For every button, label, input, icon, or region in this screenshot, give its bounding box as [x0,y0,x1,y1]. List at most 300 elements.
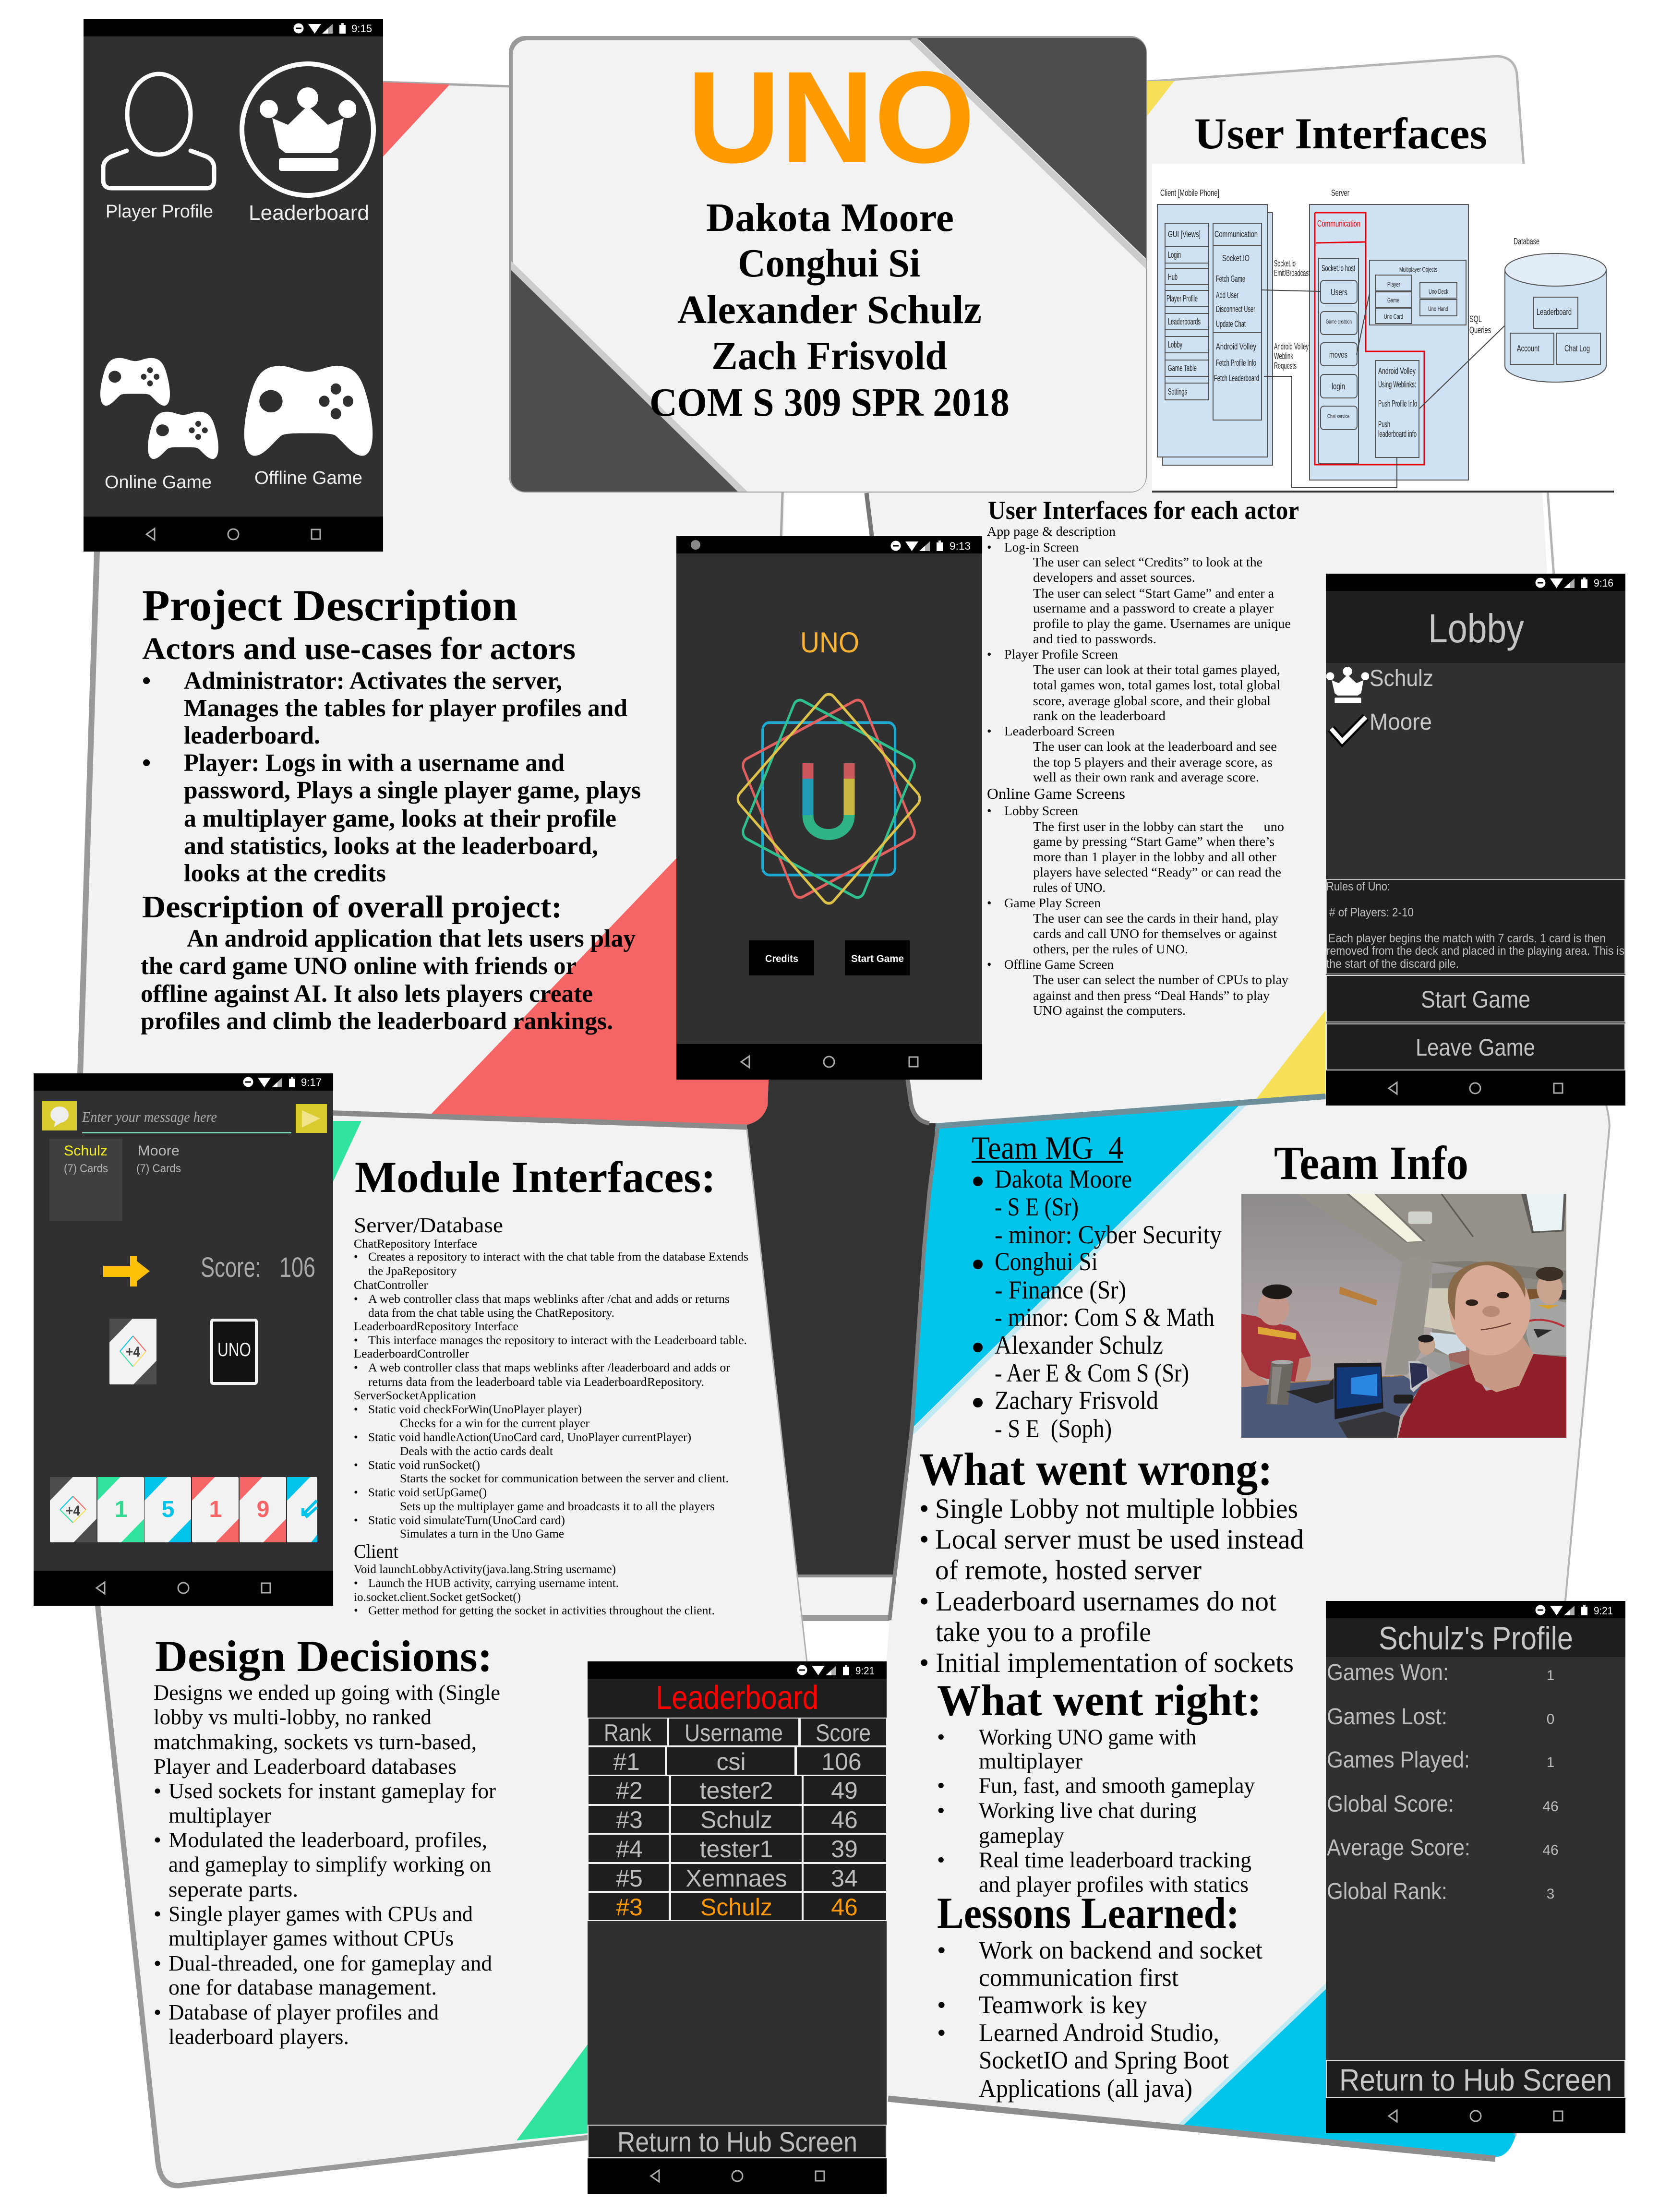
chart: architecture diagram: Add User [1216,290,1238,300]
text block: what went wrong: • [919,1647,929,1678]
phone: leaderboard screen [588,1661,887,2194]
text block: what went wrong: Initial implementation of sockets [936,1647,1294,1678]
text block: design decisions: • [154,1901,161,1926]
table: rankings: 106 [821,1748,862,1775]
chart: architecture diagram: Chat Log [1564,344,1590,353]
button: Start Game [1326,975,1625,1022]
chart: architecture diagram: Uno Card [1384,313,1403,320]
chart: architecture diagram: Lobby [1168,340,1182,349]
table: rankings: #1 [613,1748,640,1775]
phone: game play screen [34,1073,333,1606]
text block: design decisions: multiplayer [168,1803,271,1827]
button: Credits: Credits [765,953,798,964]
text block: user interfaces for each actor: Leaderboard Screen [1004,724,1115,738]
table: rankings: #2 [616,1777,643,1804]
text block: user interfaces for each actor: The user can look at the leaderboard and see [1033,739,1277,754]
button: Start Game [845,940,910,975]
icon: chat button [42,1101,77,1130]
table: rankings: 34 [831,1865,858,1892]
button: Return to Hub Screen: Return to Hub Screen [617,2127,857,2158]
chart: architecture diagram: Update Chat [1216,319,1246,329]
text block: user interfaces for each actor [987,496,1299,1018]
text block: user interfaces for each actor: The user can look at their total games played, [1033,662,1280,677]
chart: architecture diagram: Android Volley [1216,342,1256,351]
text block: project description: password, Plays a single player game, plays [184,777,641,804]
text block: user interfaces for each actor: profile to play the game. Usernames are unique [1033,616,1291,631]
text block: module interfaces: Static void setUpGame() [368,1486,487,1499]
icon: UNO logo [735,691,923,906]
phone: game play screen: 9:17 [301,1076,322,1088]
panel: dark card behind module interfaces [720,1056,941,1621]
team names and course [649,195,1010,425]
text block: module interfaces: the JpaRepository [368,1265,457,1278]
text block: team roster: - minor: Cyber Security [995,1220,1222,1249]
title: Schulz's Profile: Schulz's Profile [1379,1620,1573,1657]
text block: module interfaces: Launch the HUB activity, carrying username intent. [368,1577,619,1590]
stats labels [1327,1660,1470,1904]
chart: architecture diagram: Multiplayer Objects [1399,265,1437,273]
text block: user interfaces for each actor: UNO against the computers. [1033,1003,1186,1018]
text block: module interfaces: • [354,1577,358,1590]
icon: online game controllers [100,358,218,459]
text block: rules of Uno: # of Players: 2-10 [1329,906,1414,919]
stats values: 0 [1547,1711,1554,1727]
text block: team roster: Zachary Frisvold [995,1386,1158,1415]
button: Leave Game: Leave Game [1416,1034,1535,1061]
text block: what went right: Fun, fast, and smooth gameplay [979,1773,1255,1798]
text block: module interfaces: Static void simulateTurn(UnoCard card) [368,1514,565,1527]
label: Moore: Moore [1370,709,1432,735]
text block: module interfaces: ChatRepository Interface [354,1238,477,1250]
phone: hub screen [84,19,383,552]
heading: Design Decisions: Design Decisions: [155,1632,493,1681]
chart: architecture diagram: login [1332,382,1345,391]
text block: user interfaces for each actor: others, per the rules of UNO. [1033,942,1188,956]
text block: lessons learned: Applications (all java) [979,2075,1192,2103]
heading: user interfaces for each actor: User Interfaces for each actor [988,496,1299,525]
team names and course: Conghui Si [738,241,920,286]
text block: user interfaces for each actor: the top 5 players and their average score, as [1033,755,1273,769]
text block: design decisions: Modulated the leaderboard, profiles, [168,1827,487,1852]
chart: architecture diagram: Users [1331,288,1347,297]
text block: project description: Administrator: Activates the server, [184,667,562,695]
text block: what went wrong: • [919,1524,929,1555]
text block: module interfaces: Sets up the multiplayer game and broadcasts it to all the players [400,1500,715,1513]
chart: architecture diagram: Socket.io [1274,259,1296,268]
text block: user interfaces for each actor: score, average global score, and their global [1033,694,1271,708]
icon: host crown [1326,667,1369,703]
chart: architecture diagram: Android Volley [1378,366,1416,376]
text block: project description: Manages the tables for player profiles and [184,695,627,722]
phone: profile screen: 9:21 [1594,1605,1613,1617]
chat input [82,1108,291,1133]
text block: design decisions: • [154,2000,161,2024]
player tile: Schulz: (7) Cards [64,1162,108,1175]
text block: user interfaces for each actor: well as their own rank and average score. [1033,770,1259,784]
text block: lessons learned [937,1888,1262,2103]
chart: architecture diagram: Leaderboard [1537,307,1572,317]
phone: lobby screen: 9:16 [1594,577,1613,589]
chart: architecture diagram: Login [1168,250,1181,260]
icon: navigation bar [741,1056,918,1068]
text block: team roster: - minor: Com S & Math [995,1303,1214,1332]
text block: design decisions: • [154,1779,161,1803]
card: discard +4 [109,1319,156,1384]
text block: user interfaces for each actor: The user can select “Start Game” and enter a [1033,586,1274,601]
text block: module interfaces: • [354,1604,358,1617]
text block: module interfaces: Static void runSocket() [368,1459,480,1472]
stats values: 46 [1542,1842,1559,1858]
button: Return to Hub Screen: Return to Hub Screen [1339,2063,1612,2097]
chart: architecture diagram: moves [1329,350,1347,360]
text block: team roster: Alexander Schulz [995,1331,1163,1359]
text block: user interfaces for each actor: more than 1 player in the lobby and all other [1033,850,1276,864]
text block: user interfaces for each actor: rules of UNO. [1033,880,1106,895]
text block: what went right: multiplayer [979,1749,1082,1774]
icon: navigation bar [96,1582,270,1594]
chart: architecture diagram: Socket.IO [1222,253,1250,263]
text block: module interfaces: returns data from the leaderboard table via LeaderboardRepository. [368,1376,704,1389]
phone: hub screen: 9:15 [351,23,372,35]
text block: module interfaces: Simulates a turn in the Uno Game [400,1527,564,1540]
text block: module interfaces: This interface manages the repository to interact with the Leaderboard table. [368,1334,747,1347]
text block: what went right: • [937,1773,945,1798]
text block: user interfaces for each actor: total games won, total games lost, total global [1033,678,1280,692]
text block: lessons learned: • [937,1936,946,1964]
text block: module interfaces: data from the chat table using the ChatRepository. [368,1307,614,1320]
heading: User Interfaces: User Interfaces [1194,109,1487,158]
icon: player profile [103,74,214,188]
text block: user interfaces for each actor: against and then press “Deal Hands” to play [1033,988,1270,1003]
text block: what went wrong [919,1443,1304,1678]
text block: design decisions: and gameplay to simplify working on [168,1852,491,1876]
label: Online Game: Online Game [105,472,212,493]
heading: What went right: What went right: [937,1676,1262,1725]
text block: project description: • [142,749,151,777]
table: rankings [588,1718,887,1921]
text block: user interfaces for each actor: • [987,957,991,972]
text block: what went right: • [937,1848,945,1873]
text block: project description: profiles and climb the leaderboard rankings. [141,1008,613,1035]
text block: module interfaces: • [354,1293,358,1306]
chart: architecture diagram: Requests [1274,361,1297,371]
text block: team roster [972,1130,1222,1443]
chart: architecture diagram: Game Table [1168,363,1197,373]
text block: user interfaces for each actor: Log-in Screen [1004,540,1079,554]
text block: user interfaces for each actor: rank on the leaderboard [1033,709,1166,723]
chart: architecture diagram: Fetch Game [1216,274,1245,284]
text block: project description: offline against AI. It also lets players create [141,980,593,1008]
chart: architecture diagram: Socket.io host [1322,264,1355,273]
text block: team roster: - Finance (Sr) [995,1275,1126,1304]
text block: user interfaces for each actor: Lobby Screen [1004,804,1079,818]
icon: ready check [1331,717,1366,741]
title: Lobby: Lobby [1428,606,1524,651]
table: rankings: #5 [616,1865,643,1892]
stats values: 3 [1547,1886,1554,1902]
text block: design decisions: Player and Leaderboard databases [154,1754,457,1779]
player tile: Schulz [49,1139,122,1221]
text block: module interfaces: • [354,1361,358,1374]
player hand cards: 5 [162,1497,174,1522]
table: rankings: Username [685,1719,783,1746]
text block: module interfaces: Starts the socket for communication between the server and client. [400,1472,729,1485]
text block: lessons learned: Work on backend and socket [979,1936,1262,1964]
heading: Team Info: Team Info [1274,1136,1468,1190]
chat input: Enter your message here [82,1108,217,1125]
text block: project description: looks at the credits [184,860,386,887]
phone: login screen: 9:13 [950,540,971,552]
stats labels: Global Rank: [1327,1879,1447,1904]
chart: architecture diagram: Using Weblinks: [1378,380,1416,389]
text block: team roster: - S E (Sr) [995,1192,1079,1221]
player hand cards [50,1477,317,1542]
text block: module interfaces: Server/Database [354,1214,503,1237]
text block: module interfaces: Deals with the actio cards dealt [400,1445,553,1458]
chart: architecture diagram: Emit/Broadcast [1274,268,1310,278]
text block: user interfaces for each actor: The user can select the number of CPUs to play [1033,973,1289,987]
chart: architecture diagram: Uno Deck [1429,288,1449,295]
player tile: Moore [136,1143,181,1175]
text block: what went right: and player profiles with statics [979,1872,1249,1897]
chart: architecture diagram: Account [1517,344,1539,353]
stats labels: Average Score: [1327,1835,1470,1861]
chart: architecture diagram: Client [Mobile Phone] [1160,188,1219,198]
text block: what went right [937,1676,1262,1897]
text block: user interfaces for each actor: • [987,647,991,661]
photo: team selfie [1241,1194,1566,1438]
text block: what went wrong: of remote, hosted server [935,1554,1202,1586]
chart: architecture diagram: Fetch Profile Info [1216,358,1256,368]
panel: team info background card [854,1077,1610,2160]
table: rankings: 46 [831,1806,858,1833]
chart: architecture diagram: Push Profile Info [1378,399,1417,409]
table: rankings: #3 [616,1894,643,1921]
text block: user interfaces for each actor: App page & description [987,524,1116,539]
text block: design decisions: Designs we ended up going with (Single [154,1680,500,1705]
heading: Actors and use-cases: Actors and use-cases for actors [142,631,576,666]
chart: architecture diagram: Database [1514,237,1539,246]
text block: design decisions [154,1632,500,2049]
stats values: 1 [1547,1755,1554,1770]
icon: offline game controller [244,366,373,456]
player hand cards: +4 [66,1503,80,1519]
chart: architecture diagram: leaderboard info [1378,429,1417,439]
player hand cards: 1 [115,1497,127,1522]
heading: Description of overall project: Description of overall project: [142,890,562,925]
label: UNO: UNO [800,626,859,659]
button: Credits [749,940,814,975]
text block: what went wrong: • [919,1586,929,1617]
text block: user interfaces for each actor: and tied to passwords. [1033,632,1156,646]
title: Leaderboard: Leaderboard [656,1679,818,1716]
icon: leaderboard crown [242,64,373,195]
table: rankings: tester1 [700,1836,773,1863]
chart: architecture diagram: Communication [1317,219,1360,228]
text block: project description: and statistics, looks at the leaderboard, [184,832,598,860]
text block: rules of Uno [1326,879,1625,974]
table: rankings: Rank [604,1719,652,1746]
text block: lessons learned: • [937,1991,946,2019]
stats values: 1 [1547,1668,1554,1683]
panel: project description background card [79,72,796,1125]
text block: design decisions: Single player games with CPUs and [168,1901,473,1926]
text block: user interfaces for each actor: The first user in the lobby can start the uno [1033,819,1284,834]
label: Player Profile: Player Profile [106,202,213,222]
chart: architecture diagram: Communication [1214,229,1258,239]
text block: module interfaces: LeaderboardRepository Interface [354,1320,518,1333]
chart: architecture diagram: Disconnect User [1216,304,1255,314]
player tile: Moore: (7) Cards [136,1162,181,1175]
chart: architecture diagram: Server [1331,188,1349,198]
icon: turn arrow [103,1256,150,1286]
player hand cards: 9 [257,1497,269,1522]
chart: architecture diagram: Chat service [1327,413,1349,420]
heading: Project Description: Project Description [142,581,517,630]
text block: module interfaces: • [354,1514,358,1527]
text block: user interfaces for each actor: cards and call UNO for themselves or against [1033,926,1277,941]
text block: lessons learned: Learned Android Studio, [979,2019,1219,2047]
stats labels: Games Played: [1327,1747,1470,1773]
text block: project description: the card game UNO online with friends or [141,952,577,980]
text block: what went wrong: Leaderboard usernames do not [936,1586,1276,1617]
table: rankings: Score [816,1719,871,1746]
text block: team roster: Conghui Si [995,1247,1098,1276]
table: rankings: Schulz [700,1894,772,1921]
icon: navigation bar [1389,1082,1563,1094]
table: rankings: 46 [831,1894,858,1921]
text block: what went wrong: Single Lobby not multiple lobbies [935,1493,1298,1524]
text block: user interfaces for each actor: • [987,804,991,818]
text block: design decisions: seperate parts. [168,1877,298,1901]
button: Start Game: Start Game [1421,986,1530,1013]
icon: send button [296,1104,327,1133]
text block: design decisions: Dual-threaded, one for gameplay and [168,1951,492,1975]
heading: Lessons Learned: Lessons Learned: [937,1888,1239,1937]
stats values: 46 [1542,1799,1559,1815]
text block: lessons learned: communication first [979,1964,1178,1992]
stats labels: Games Lost: [1327,1704,1447,1730]
text block: what went wrong: take you to a profile [936,1616,1151,1647]
text block: module interfaces: • [354,1486,358,1499]
chart: architecture diagram: Player [1387,280,1400,288]
text block: user interfaces for each actor: developers and asset sources. [1033,570,1195,585]
card: draw pile: UNO [217,1339,251,1360]
phone: leaderboard screen: 9:21 [855,1665,875,1677]
text block: module interfaces: io.socket.client.Socket getSocket() [354,1591,521,1604]
button: Leave Game [1326,1024,1625,1070]
icon: navigation bar [651,2170,824,2182]
chart: architecture diagram: Settings [1168,387,1187,397]
text block: module interfaces: A web controller class that maps weblinks after /chat and adds or returns [368,1293,730,1306]
text block: module interfaces: Static void handleAction(UnoCard card, UnoPlayer currentPlayer) [368,1431,691,1444]
text block: module interfaces: Client [354,1540,398,1562]
text block: what went right: • [937,1798,945,1823]
text block: module interfaces: A web controller class that maps weblinks after /leaderboard and adds or [368,1361,731,1374]
score: 106 [279,1252,315,1283]
text block: rules of Uno: removed from the deck and placed in the playing area. This is [1326,944,1624,958]
text block: user interfaces for each actor: The user can select “Credits” to look at the [1033,555,1262,569]
text block: design decisions: • [154,1951,161,1975]
text block: design decisions: matchmaking, sockets vs turn-based, [154,1730,477,1754]
label: Schulz: Schulz [1370,666,1433,691]
text block: module interfaces [354,1153,748,1617]
text block: user interfaces for each actor: Online Game Screens [987,785,1125,802]
text block: user interfaces for each actor: Game Play Screen [1004,896,1101,910]
heading: Team MG 4: Team MG 4 [972,1130,1123,1166]
text block: what went wrong: Local server must be used instead [935,1524,1304,1555]
text block: project description: leaderboard. [184,722,320,749]
icon: navigation bar [1389,2110,1563,2122]
score: Score: [201,1252,261,1283]
table: rankings: #3 [616,1806,643,1833]
chart: architecture diagram: Uno Hand [1428,305,1448,313]
table: rankings: Xemnaes [685,1865,787,1892]
player tile: Moore: Moore [138,1143,180,1159]
text block: team roster: - Aer E & Com S (Sr) [995,1358,1189,1387]
text block: rules of Uno: the start of the discard pile. [1326,957,1459,971]
text block: user interfaces for each actor: Offline Game Screen [1004,957,1114,972]
text block: design decisions: • [154,1827,161,1852]
button: Start Game: Start Game [851,953,904,964]
text block: module interfaces: • [354,1459,358,1472]
card: draw pile [212,1320,256,1383]
chart: architecture diagram: Fetch Leaderboard [1214,373,1259,383]
text block: lessons learned: SocketIO and Spring Boot [979,2046,1229,2074]
text block: user interfaces for each actor: • [987,540,991,554]
panel: module interfaces background card [43,1102,857,2186]
chart: architecture diagram: Hub [1168,272,1178,282]
chart: architecture diagram: Android Volley [1274,342,1309,351]
text block: module interfaces: • [354,1403,358,1416]
stats labels: Games Won: [1327,1660,1449,1685]
heading: Module Interfaces: Module Interfaces: [355,1153,716,1202]
text block: rules of Uno: Each player begins the match with 7 cards. 1 card is then [1328,932,1606,945]
text block: module interfaces: Void launchLobbyActivity(java.lang.String username) [354,1563,616,1576]
text block: user interfaces for each actor: • [987,896,991,910]
table: rankings: Schulz [700,1806,772,1833]
chart: architecture diagram: Weblink [1274,351,1294,361]
text block: team roster: - S E (Soph) [995,1414,1112,1443]
text block: project description: An android application that lets users play [187,925,636,952]
text block: user interfaces for each actor: The user can see the cards in their hand, play [1033,911,1279,926]
label: Offline Game: Offline Game [254,468,362,488]
table: rankings: tester2 [700,1777,773,1804]
stats labels: Global Score: [1327,1791,1454,1817]
text block: module interfaces: Static void checkForWin(UnoPlayer player) [368,1403,582,1416]
text block: project description [141,581,641,1035]
text block: user interfaces for each actor: Player Profile Screen [1004,647,1118,661]
text block: project description: • [142,667,151,695]
text block: module interfaces: • [354,1250,358,1263]
title: UNO: UNO [687,44,975,190]
chart: architecture diagram: Game creation [1326,318,1352,325]
text block: team roster: Dakota Moore [995,1165,1132,1193]
text block: project description: Player: Logs in with a username and [184,749,565,777]
phone: profile screen [1326,1601,1625,2133]
chart: architecture diagram: Player Profile [1166,294,1198,303]
stats values [1542,1668,1559,1902]
team names and course: COM S 309 SPR 2018 [649,380,1010,425]
text block: rules of Uno: Rules of Uno: [1326,880,1390,893]
text block: user interfaces for each actor: • [987,724,991,738]
text block: user interfaces for each actor: username and a password to create a player [1033,601,1274,615]
chart: architecture diagram: Game [1387,296,1399,304]
chart: architecture diagram: GUI [Views] [1168,229,1201,239]
text block: module interfaces: ServerSocketApplication [354,1389,476,1402]
text block: module interfaces: • [354,1431,358,1444]
text block: what went wrong: • [919,1493,929,1524]
